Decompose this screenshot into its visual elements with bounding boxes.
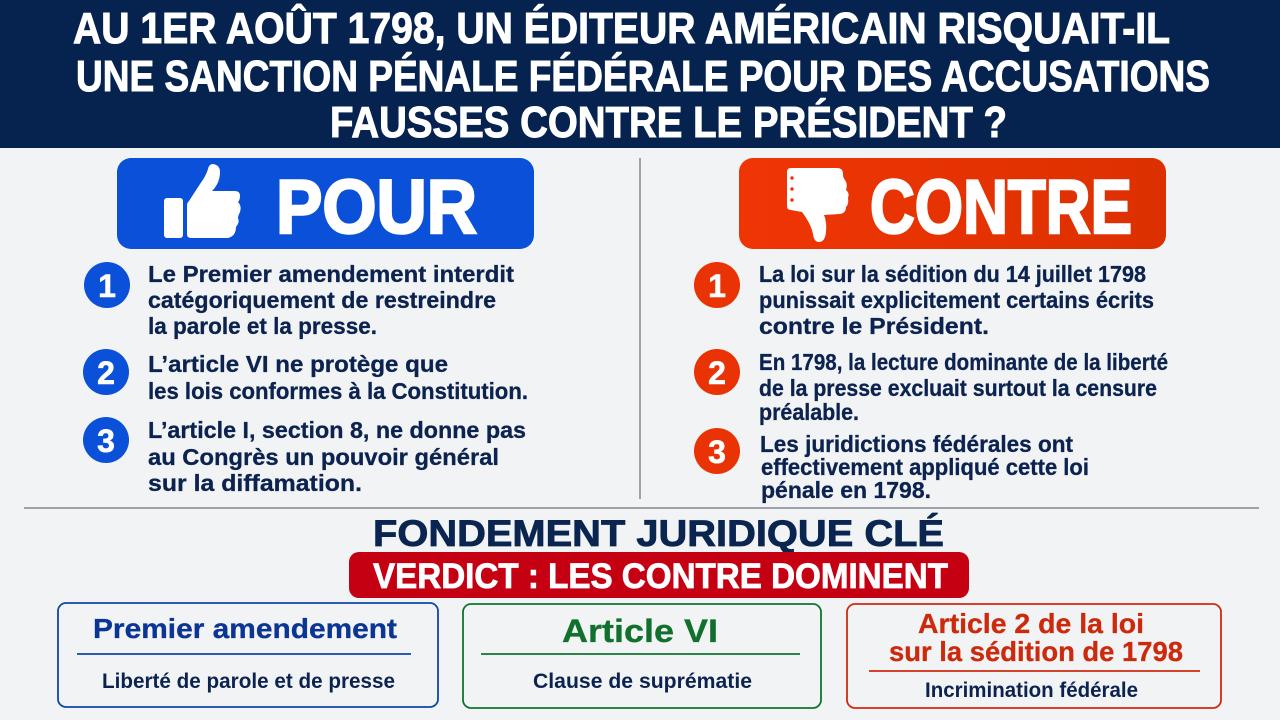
pour argument 2: les lois conformes à la Constitution. [148, 378, 528, 404]
pour argument 3: 3 [97, 423, 115, 459]
pour argument 3 [83, 417, 526, 496]
card: article VI: Clause de suprématie [533, 670, 752, 693]
pour argument 1 [84, 261, 514, 339]
contre argument 2: En 1798, la lecture dominante de la liberté [759, 349, 1168, 375]
contre argument 2: préalable. [759, 399, 859, 425]
card: premier amendement: Premier amendement [93, 613, 397, 644]
contre argument 2: 2 [708, 355, 726, 391]
title banner [0, 0, 1280, 148]
card: article 2: Incrimination fédérale [925, 679, 1138, 702]
contre header: CONTRE [870, 165, 1132, 250]
pour argument 3: sur la diffamation. [148, 470, 362, 496]
heading: fondement juridique: FONDEMENT JURIDIQUE CLÉ [373, 513, 944, 554]
pour argument 1: Le Premier amendement interdit [148, 261, 514, 287]
pour argument 1: 1 [98, 268, 116, 304]
pour header: POUR [276, 165, 477, 250]
contre argument 2: de la presse excluait surtout la censure [759, 375, 1157, 401]
contre header [739, 158, 1166, 250]
pour header [117, 158, 534, 250]
title banner: AU 1ER AOÛT 1798, UN ÉDITEUR AMÉRICAIN RISQUAIT-IL [73, 2, 1170, 53]
pour argument 2 [83, 349, 528, 404]
card: article 2: Article 2 de la loi [918, 608, 1144, 639]
card: article VI: Article VI [562, 613, 718, 649]
card: article 2 [847, 604, 1221, 708]
contre argument 3: 3 [708, 434, 726, 470]
pour argument 2: L’article VI ne protège que [148, 351, 448, 377]
verdict banner: VERDICT : LES CONTRE DOMINENT [373, 557, 948, 596]
pour argument 1: la parole et la presse. [148, 313, 377, 339]
card: premier amendement [58, 603, 438, 707]
contre argument 3: effectivement appliqué cette loi [761, 454, 1089, 480]
title banner: FAUSSES CONTRE LE PRÉSIDENT ? [330, 97, 1007, 147]
contre argument 1: contre le Président. [759, 313, 989, 339]
panel: pour [83, 158, 534, 496]
pour argument 3: au Congrès un pouvoir général [148, 444, 499, 470]
contre argument 1: punissait explicitement certains écrits [759, 287, 1154, 313]
contre argument 1 [694, 261, 1154, 339]
contre argument 1: 1 [708, 268, 726, 304]
contre argument 3: pénale en 1798. [761, 477, 931, 503]
contre argument 3 [694, 428, 1089, 503]
contre argument 1: La loi sur la sédition du 14 juillet 1798 [759, 261, 1146, 287]
icon: thumbs down [787, 168, 849, 242]
contre argument 2 [694, 349, 1168, 425]
panel: contre [694, 158, 1168, 503]
card: article 2: sur la sédition de 1798 [889, 636, 1183, 667]
pour argument 2: 2 [97, 355, 115, 391]
card: premier amendement: Liberté de parole et de presse [102, 670, 395, 693]
pour argument 3: L’article I, section 8, ne donne pas [148, 417, 526, 443]
icon: thumbs up [164, 164, 241, 238]
pour argument 1: catégoriquement de restreindre [148, 287, 496, 313]
contre argument 3: Les juridictions fédérales ont [760, 431, 1073, 457]
card: article VI [463, 604, 821, 708]
